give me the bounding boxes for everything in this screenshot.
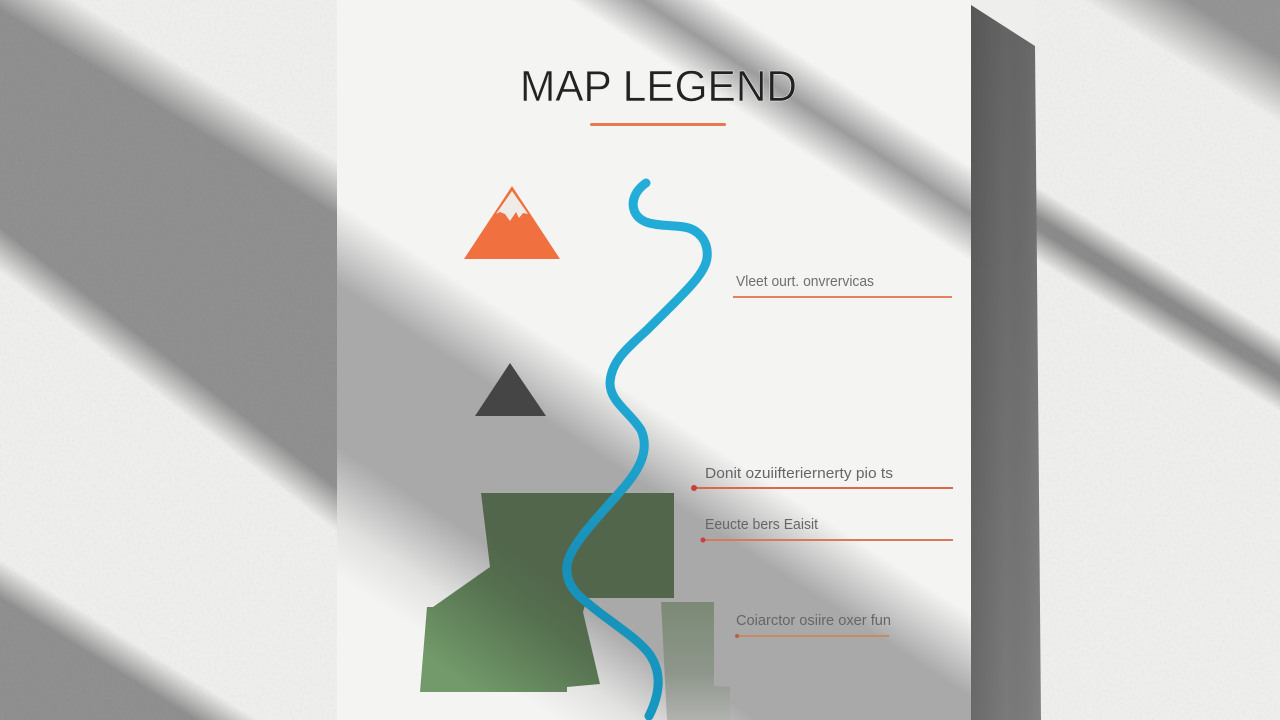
marker dot 2	[691, 485, 697, 491]
leader line 3	[703, 539, 953, 541]
leader line 4	[736, 635, 889, 637]
left wall shadows	[0, 0, 337, 720]
forest area: main green block	[420, 493, 674, 692]
icon: orange snow-capped mountain	[464, 186, 560, 259]
label 3: Eeucte bers Eaisit	[705, 516, 819, 533]
forest area: faded green block	[661, 602, 730, 720]
title underline	[590, 123, 726, 126]
poster shadow bands	[337, 0, 971, 720]
legend row 4	[735, 612, 891, 638]
title: MAP LEGEND	[520, 62, 797, 111]
marker dot 3	[700, 538, 706, 542]
leader line 2	[694, 487, 953, 489]
right wall shadows	[1035, 0, 1280, 720]
legend row 3	[700, 516, 953, 542]
label 1: Vleet ourt. onvrervicas	[736, 273, 874, 290]
poster sheet	[337, 0, 971, 720]
marker dot 4	[735, 634, 739, 638]
side of the poster	[971, 5, 1041, 720]
label 2: Donit ozuiifteriernerty pio ts	[705, 465, 893, 482]
leader line 1	[733, 296, 952, 298]
legend row 2	[691, 465, 953, 491]
label 4: Coiarctor osiire oxer fun	[736, 612, 891, 629]
river	[567, 183, 707, 716]
icon: dark peak	[475, 363, 546, 416]
